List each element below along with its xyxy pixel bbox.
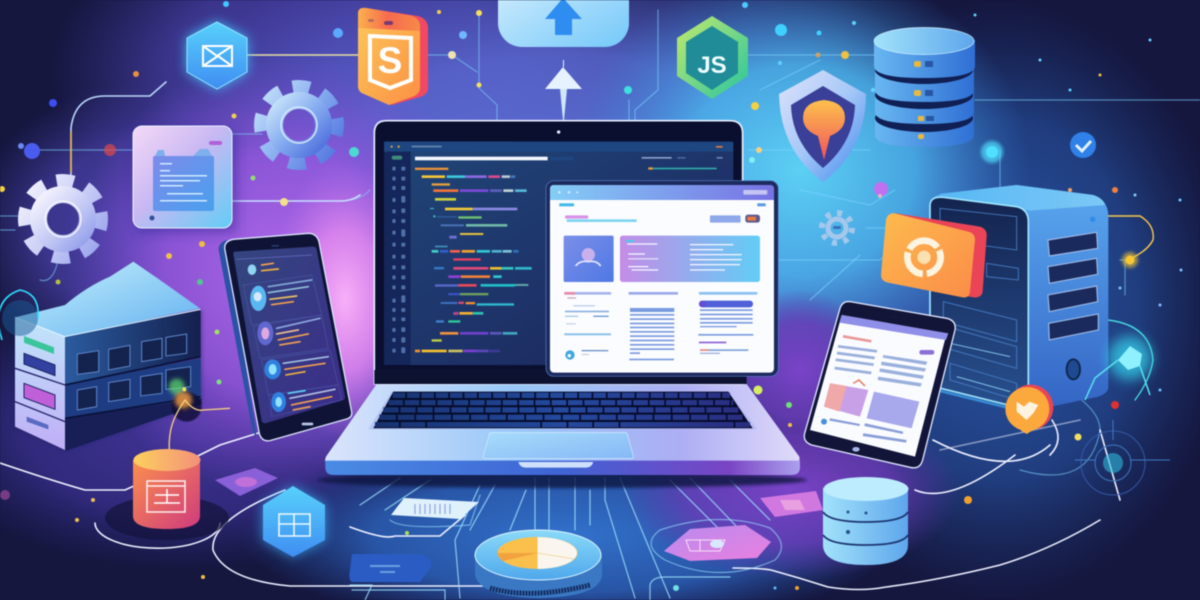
arrow: up to cloud <box>545 60 582 120</box>
laptop base <box>325 384 800 475</box>
illustration: left server stack <box>15 262 230 451</box>
illustration: right tower server <box>930 185 1108 411</box>
panel: code card <box>133 126 236 232</box>
icon: blue database bottom <box>823 477 908 565</box>
icon: security shield <box>779 70 866 182</box>
tile: pink chip <box>760 491 823 517</box>
icon: JS hexagon: JS <box>697 52 727 79</box>
icon: check badge <box>1070 132 1096 158</box>
tile: pink hexagon <box>664 525 771 561</box>
code lines <box>415 168 532 352</box>
icon: glowing ring left <box>0 290 38 340</box>
icon: gear small <box>822 213 852 243</box>
tile: white chart <box>391 498 479 519</box>
illustration: right tablet <box>804 302 955 468</box>
web page tablet <box>546 181 778 376</box>
icon: orange shield badge <box>1005 385 1053 434</box>
icon: orange badge card <box>881 213 987 297</box>
icon: small node bottom right <box>1075 420 1170 495</box>
icon: blue layout hexagon <box>263 486 325 557</box>
icon: gear left <box>19 175 107 263</box>
tile: blue chip <box>349 554 432 582</box>
chart: pie puck <box>475 530 602 598</box>
icon: glow star right <box>981 141 1138 268</box>
laptop shadow <box>317 472 807 488</box>
icon: HTML5 S badge: S <box>378 40 402 81</box>
icon: JS hexagon <box>677 16 748 99</box>
tile: purple chip <box>215 468 278 496</box>
icon: gear top <box>255 81 343 169</box>
icon: red database cylinder <box>105 449 229 540</box>
icon: upload cloud <box>498 0 629 47</box>
icon: glowing network node <box>1085 336 1152 400</box>
icon: HTML5 S badge <box>358 8 428 105</box>
illustration: smartphone <box>219 233 352 441</box>
icon: database stack top right <box>874 28 975 147</box>
laptop lid and screen <box>374 121 747 384</box>
icon: envelope hexagon <box>187 22 247 89</box>
illustration: laptop <box>325 121 800 475</box>
